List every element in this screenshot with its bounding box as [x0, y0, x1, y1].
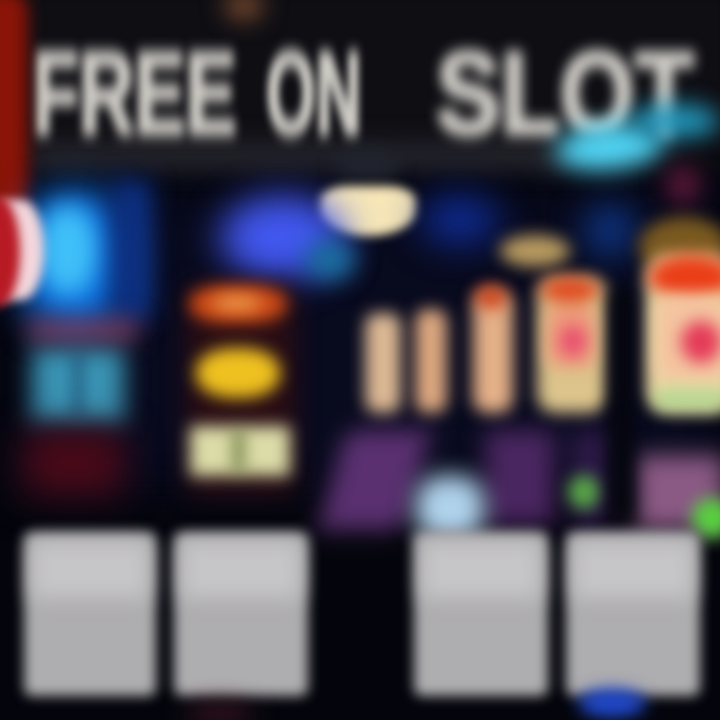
purple base right	[570, 430, 610, 525]
lower machine bases	[306, 416, 720, 550]
cyan glow right	[630, 104, 720, 138]
title word: free: FREE	[32, 28, 237, 160]
red curtain at left edge	[0, 0, 28, 230]
light blue glow	[415, 475, 485, 540]
title: free online slots	[30, 28, 704, 160]
blue purple glow	[220, 195, 345, 280]
card body	[566, 532, 700, 696]
purple base mid	[485, 430, 555, 525]
machine 5 heart	[681, 321, 720, 363]
cabinet	[186, 285, 296, 495]
reels	[190, 426, 290, 476]
machine 5 green base	[655, 390, 720, 408]
cyan glow under title	[553, 118, 667, 176]
card body	[414, 532, 548, 696]
machine 4 red top	[541, 277, 599, 303]
grey card 4	[556, 522, 710, 706]
magenta glow top right	[665, 165, 701, 205]
title word: on: ON	[266, 28, 362, 160]
card body	[174, 532, 308, 696]
machine 5 red top	[649, 255, 720, 299]
reel divider	[74, 350, 82, 420]
machine 3 top	[475, 285, 507, 309]
background: header band	[0, 0, 720, 170]
grey card 1	[14, 522, 166, 706]
machine 4 screen	[547, 303, 595, 367]
dark red base	[24, 430, 124, 495]
machine 4 dome	[500, 235, 570, 267]
white and red circle	[0, 200, 44, 300]
blue side panel	[112, 180, 152, 320]
background: casino floor	[20, 190, 720, 490]
blue glow behind right row	[420, 195, 500, 245]
reel divider	[234, 430, 243, 472]
red circle edge	[0, 197, 20, 307]
central slot machine	[175, 167, 373, 504]
machine 2	[415, 309, 447, 413]
machine 5 dome	[639, 217, 720, 277]
bright green light	[692, 498, 720, 538]
left slot machine: blue screen	[0, 162, 168, 515]
machine 1	[365, 313, 401, 413]
orange top	[190, 285, 286, 323]
pink base right	[635, 455, 720, 530]
purple base left	[318, 430, 431, 530]
grey card 2	[164, 522, 318, 706]
red glow at bottom	[185, 704, 255, 720]
title word: slot: SLOT	[436, 28, 694, 160]
row of slot machines	[352, 207, 720, 426]
top ornament	[224, 0, 264, 20]
orange light	[212, 295, 262, 311]
machine 5	[645, 255, 720, 413]
card body	[24, 532, 156, 696]
lamp glow	[320, 186, 416, 236]
machine 4	[537, 277, 607, 413]
background: strip under title	[30, 142, 570, 172]
card heading	[422, 542, 540, 598]
small green light	[568, 475, 600, 509]
yellow panel	[196, 348, 280, 398]
bright blue centre	[38, 205, 98, 295]
machine 3	[473, 291, 513, 413]
blue glow at bottom	[578, 688, 646, 718]
machine 5 screen	[657, 295, 720, 379]
dark pillar between machines	[610, 290, 634, 520]
grey card 3	[404, 522, 558, 706]
cyan glow	[305, 240, 355, 280]
lamp shade	[334, 150, 400, 180]
blue glow	[20, 190, 130, 330]
pink accents	[28, 321, 138, 339]
card heading	[32, 542, 148, 598]
machine 4 heart	[559, 325, 587, 357]
blue glow far right	[585, 205, 635, 255]
ceiling lamp	[313, 161, 424, 244]
card heading	[182, 542, 300, 598]
cyan reels	[32, 347, 124, 423]
card heading	[574, 542, 692, 598]
